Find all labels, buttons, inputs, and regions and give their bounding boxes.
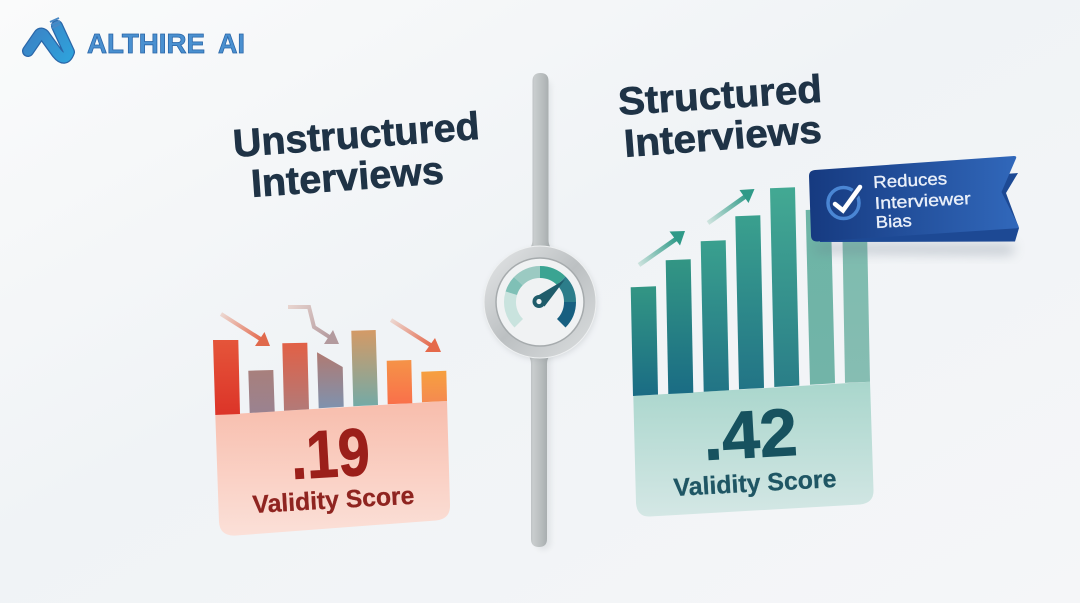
heading: Unstructured Interviews: Unstructured xyxy=(232,105,481,166)
ribbon badge: reduces interviewer bias xyxy=(809,156,1019,254)
ribbon tail xyxy=(820,173,1019,242)
heading: Structured Interviews xyxy=(617,68,823,166)
logo wordmark: ALTHIRE xyxy=(87,28,205,59)
gauge needle xyxy=(532,280,565,308)
badge text: Bias xyxy=(875,211,912,232)
ribbon body xyxy=(809,156,1019,242)
arrows: decline xyxy=(221,307,441,352)
score label: Validity Score xyxy=(673,465,837,502)
panel: unstructured validity xyxy=(213,307,450,536)
heading: Unstructured Interviews xyxy=(232,105,481,206)
bar chart: rising xyxy=(631,187,870,396)
arrows: growth xyxy=(639,189,754,265)
bar chart: declining xyxy=(213,330,447,415)
score card xyxy=(633,382,874,517)
heading: Unstructured Interviews: Interviews xyxy=(250,149,445,206)
logo: Althire AI xyxy=(28,18,245,59)
badge text xyxy=(873,169,971,232)
badge text: Interviewer xyxy=(874,189,971,213)
gauge dial xyxy=(504,266,576,328)
gauge ring xyxy=(484,246,597,360)
logo wordmark: AI xyxy=(218,28,245,59)
score value: .42 xyxy=(701,395,799,475)
panel: structured validity xyxy=(631,187,874,517)
icon: check badge xyxy=(828,187,860,218)
heading: Structured Interviews: Structured xyxy=(617,68,823,124)
icon: logo mark xyxy=(28,18,69,58)
badge text: Reduces xyxy=(873,169,948,192)
center slider with gauge xyxy=(484,73,597,550)
score label: Validity Score xyxy=(252,482,415,519)
score value: .19 xyxy=(289,415,372,494)
score card xyxy=(215,401,450,536)
heading: Structured Interviews: Interviews xyxy=(622,108,823,166)
slider stem xyxy=(524,73,556,550)
